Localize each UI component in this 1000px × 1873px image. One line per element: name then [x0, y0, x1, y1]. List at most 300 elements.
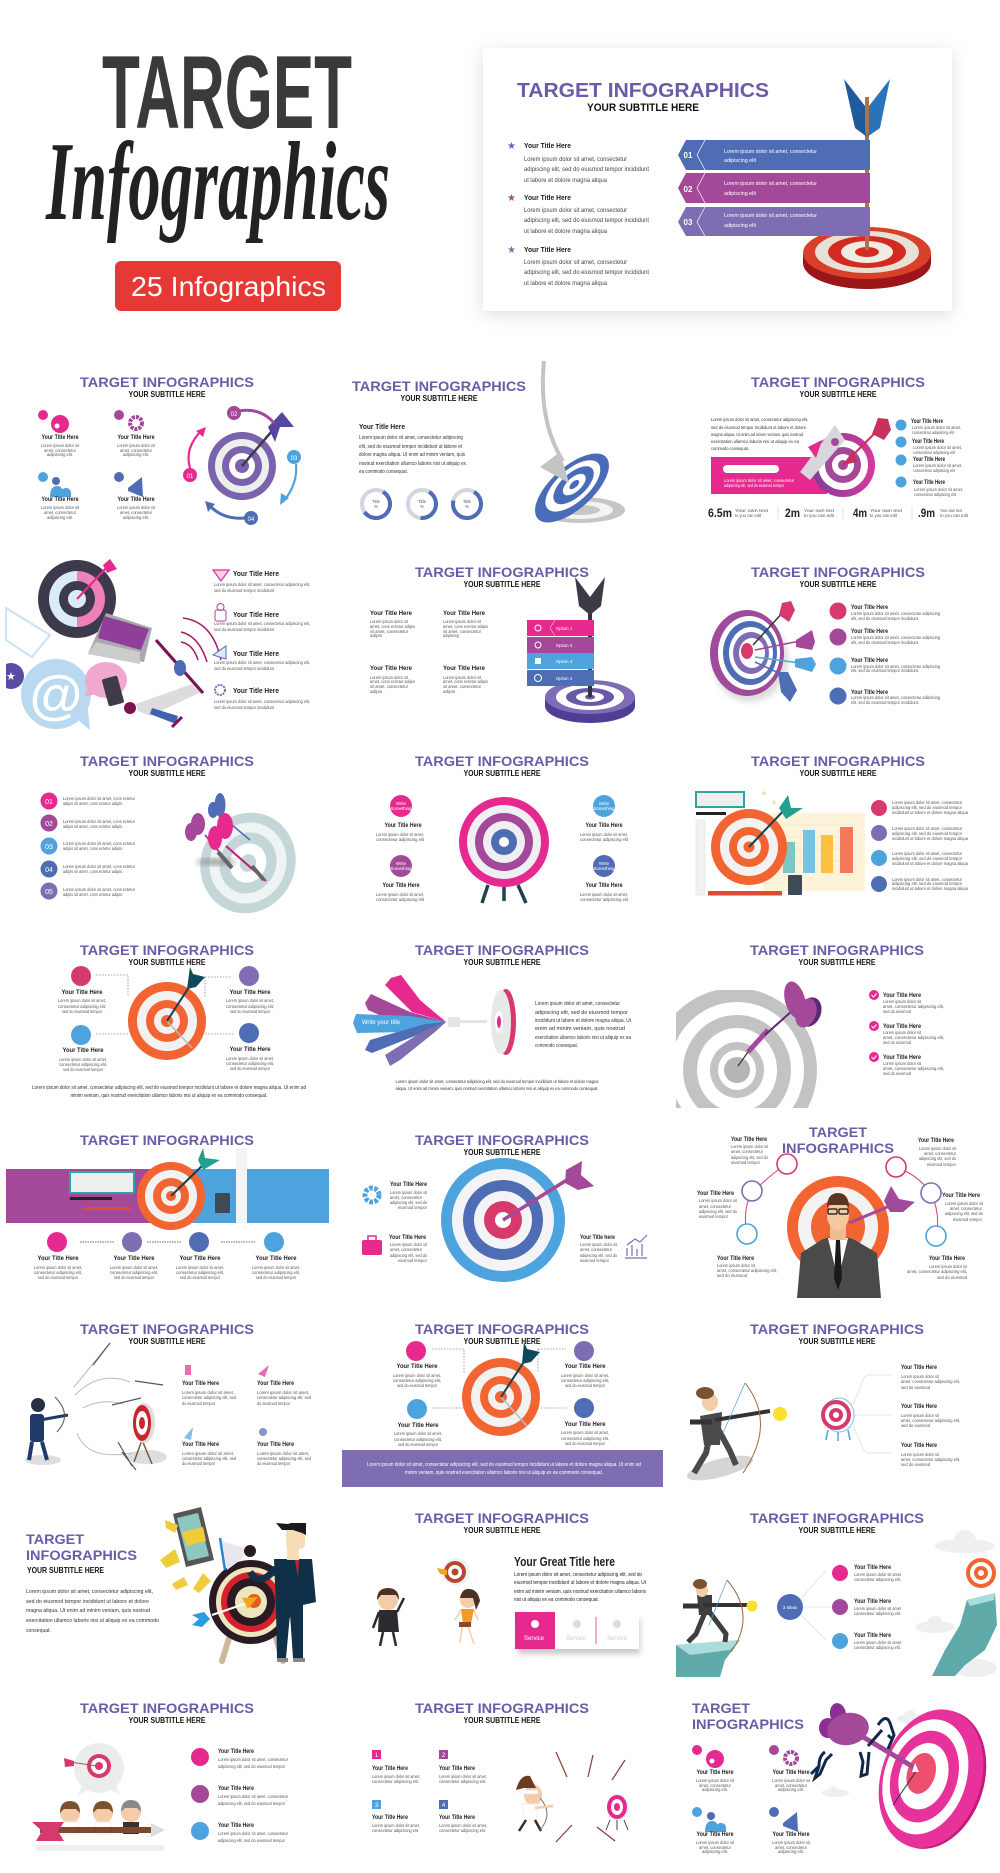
- target: purple with cycle arrows: 02: [231, 412, 238, 418]
- text blocks: sed do eiusmod: [901, 1462, 931, 1467]
- text block: [359, 424, 466, 475]
- text blocks: eiusmod tempor: [953, 1217, 982, 1222]
- numbered list: Lorem ipsum dolor sit amet, cons ectetur: [63, 864, 135, 869]
- stats row: 2m: [785, 506, 800, 520]
- text: four items: adipiscing elit.: [47, 515, 73, 520]
- target: purple with cycle arrows: [183, 406, 301, 525]
- text: four items: Lorem ipsum dolor sit: [696, 1778, 735, 1783]
- text block: consequat.: [26, 1628, 51, 1634]
- heading and text: Your Great Title here: [514, 1554, 615, 1569]
- panel: featured slide card: [483, 48, 952, 315]
- process steps: consectetur adipiscing elit,: [110, 1270, 158, 1275]
- text blocks: Lorem ipsum dolor sit: [901, 1413, 940, 1418]
- wordmark: Infographics script: Infographics: [45, 120, 390, 244]
- target with four darts: [710, 601, 816, 702]
- four callouts: consectetur adipiscing elit,: [58, 1004, 106, 1009]
- numbered items: Lorem ipsum dolor sit amet,: [439, 1823, 487, 1828]
- stats row: Your own text: [804, 508, 835, 513]
- text columns: adipiscing: [443, 633, 459, 638]
- text blocks: sed do eiusmod: [717, 1273, 748, 1278]
- text: four items: [41, 435, 156, 520]
- list: four items: Lorem ipsum dolor sit amet,: [914, 487, 963, 492]
- list: three items: [191, 1748, 288, 1843]
- text: four items: Lorem ipsum dolor sit: [41, 443, 80, 448]
- checklist: sed do eiusmod: [883, 1040, 912, 1045]
- list: four items: [871, 800, 969, 892]
- panel: slide row 5 col 3: INFOGRAPHICS: [782, 1140, 894, 1156]
- list: four items: adipiscing elit, sed do eiusmod tempor: [892, 856, 962, 861]
- list: four items: consectetur adipiscing elit: [913, 468, 956, 473]
- panel: slide row 7 col 1: TARGET: [26, 1531, 84, 1547]
- list: four items: Your Title Here: [233, 686, 279, 695]
- text: four items: adipiscing elit.: [702, 1787, 728, 1792]
- text block: enim ad minim veniam, quis nostrud: [535, 1026, 625, 1032]
- process steps: Your Title Here: [38, 1256, 79, 1262]
- text: four items: adipiscing elit.: [702, 1849, 728, 1854]
- items: Lorem ipsum dolor sit amet,: [182, 1451, 234, 1456]
- businessman: [250, 1523, 316, 1662]
- numbered list: adipis sit amet, cons ectetur adipis.: [63, 869, 123, 874]
- text blocks: amet, consectetur adipiscing elit,: [901, 1457, 960, 1462]
- stats row: Your own text: [870, 508, 903, 513]
- left and right items: Lorem ipsum dolor sit: [580, 1242, 618, 1247]
- list: four items: Lorem ipsum dolor sit amet, consectetur adipiscing elit,: [214, 582, 310, 587]
- list: four items: incididunt ut labore et dolore magna aliqua: [892, 861, 969, 866]
- text blocks: eiusmod tempor: [927, 1162, 956, 1167]
- dart shaft and fletching: [575, 577, 605, 697]
- panel: slide row 4 col 2: [353, 942, 632, 1091]
- list: three items: adipiscing elit, sed do eiusmod tempor: [218, 1764, 285, 1769]
- text blocks: adipiscing elit, sed do: [945, 1211, 984, 1216]
- process steps: Lorem ipsum dolor sit amet,: [34, 1265, 82, 1270]
- four callouts: Lorem ipsum dolor sit amet,: [394, 1431, 442, 1436]
- icons: four items: [38, 410, 143, 497]
- process steps: Your Title Here: [256, 1256, 297, 1262]
- numbered items: 2: [442, 1753, 446, 1759]
- target with darts: [184, 793, 312, 929]
- four callouts: Lorem ipsum dolor sit amet,: [59, 1057, 107, 1062]
- checklist: Lorem ipsum dolor sit: [883, 1030, 922, 1035]
- panel: slide row 8 col 3: INFOGRAPHICS: [692, 1716, 804, 1732]
- target: red 3D: [803, 227, 931, 289]
- donut charts: %: [420, 504, 424, 509]
- stats row: 6.5m: [708, 506, 732, 520]
- stats row: 4m: [853, 506, 867, 520]
- text columns: sit amet, consectetur: [370, 629, 408, 634]
- list: three items: adipiscing elit, sed do eiusmod tempor: [218, 1801, 285, 1806]
- text blocks: Lorem ipsum dolor sit: [945, 1201, 984, 1206]
- purple footer banner: [342, 1450, 663, 1487]
- panel: slide row 8 col 2: YOUR SUBTITLE HERE: [464, 1716, 541, 1725]
- list: four items: elit, sed do eiusmod tempor incididunt.: [851, 616, 919, 621]
- text blocks: Your Title Here: [901, 1365, 938, 1371]
- text list: Your Title Here: [524, 245, 571, 254]
- cartoon people with target: [373, 1558, 480, 1646]
- list: four items: Your Title Here: [851, 629, 889, 635]
- four callouts: consectetur adipiscing elit: [376, 837, 425, 842]
- text columns: Your Title Here: [370, 666, 413, 672]
- at-sign bubble: @: [30, 665, 82, 725]
- list: four items: sed do eiusmod tempor incididunt: [214, 588, 275, 593]
- team on arrow: [32, 1800, 165, 1851]
- numbered items: Lorem ipsum dolor sit amet,: [439, 1774, 487, 1779]
- donut charts: Title: [463, 499, 472, 504]
- text block: sed do eiusmod tempor incididunt ut labore et dolore: [26, 1599, 149, 1605]
- panel: slide row 3 col 2: [376, 753, 629, 903]
- four callouts: Write: [396, 861, 407, 866]
- numbered items: Your Title Here: [439, 1815, 476, 1821]
- list: four items: Lorem ipsum dolor sit amet, consectetur adipiscing: [851, 664, 940, 669]
- four callouts: consectetur adipiscing elit: [580, 897, 629, 902]
- items: consectetur adipiscing elit, sed: [257, 1395, 312, 1400]
- dotted connectors: [432, 1349, 568, 1408]
- text columns: adipis: [370, 633, 383, 638]
- target: black red cream: [192, 1560, 293, 1661]
- panel: slide row 4 col 2: TARGET INFOGRAPHICS: [415, 942, 589, 958]
- checklist: [869, 990, 944, 1076]
- target: dark with pink half: [38, 559, 117, 638]
- numbered items: consectetur adipiscing elit.: [372, 1779, 419, 1784]
- ribbons: three options: adipiscing elit: [724, 223, 756, 229]
- text blocks: amet, consectetur adipiscing elit,: [907, 1269, 967, 1274]
- target and businessman: [787, 1176, 915, 1298]
- left and right items: adipiscing elit, sed do: [580, 1253, 617, 1258]
- four callouts: Lorem ipsum dolor sit amet,: [561, 1373, 609, 1378]
- star badge: [6, 663, 24, 689]
- list: four items: sed do eiusmod tempor incididunt: [214, 627, 275, 632]
- list: four items: elit, sed do eiusmod tempor incididunt.: [851, 640, 919, 645]
- items: Your Title Here: [182, 1381, 220, 1387]
- process steps: Your Title Here: [180, 1256, 221, 1262]
- text block: nostrud exercitation ullamco laboris nisi ut aliquip ex: [359, 461, 466, 467]
- text: four items: Your Title Here: [772, 1770, 810, 1776]
- target: blue with purple arrow: [441, 1158, 594, 1282]
- text columns: Your Title Here: [443, 666, 486, 672]
- left and right items: eiusmod tempor: [398, 1205, 427, 1210]
- four callouts: [376, 795, 629, 902]
- donut charts: %: [374, 504, 378, 509]
- text: four items: Your Title Here: [42, 497, 79, 503]
- text columns: Lorem ipsum dolor sit: [370, 675, 409, 680]
- list: four items: Your Title Here: [911, 419, 944, 425]
- numbered items: Your Title Here: [372, 1766, 409, 1772]
- idea tree: Lorem ipsum dolor sit amet: [854, 1640, 902, 1645]
- panel: slide row 4 col 3: [676, 946, 944, 1108]
- text list: Your Title Here: [524, 193, 571, 202]
- four callouts: consectetur adipiscing elit,: [59, 1062, 107, 1067]
- text columns: sit amet, consectetur: [370, 684, 408, 689]
- text columns: Your Title Here: [370, 611, 413, 617]
- left and right items: Your Title Here: [390, 1182, 428, 1188]
- panel: slide row 2 col 2: TARGET INFOGRAPHICS: [415, 564, 589, 580]
- panel: slide row 4 col 1: YOUR SUBTITLE HERE: [128, 958, 206, 967]
- panel: featured slide card: TARGET INFOGRAPHICS: [517, 80, 769, 102]
- footer text: [396, 1079, 599, 1091]
- items: Your Title Here: [182, 1442, 220, 1448]
- text block: Lorem ipsum dolor sit amet, consectetur adipiscing elit,: [711, 417, 808, 422]
- numbered items: [372, 1750, 487, 1833]
- text blocks: Lorem ipsum dolor sit: [901, 1374, 940, 1379]
- flag: [220, 1538, 256, 1570]
- text: four items: Your Title Here: [118, 435, 155, 441]
- target: purple with cycle arrows: 01: [187, 474, 194, 480]
- text blocks: Lorem ipsum dolor sit: [717, 1263, 756, 1268]
- text blocks: amet, consectetur: [731, 1149, 763, 1154]
- text list: adipiscing elit, sed do eiusmod tempor incididunt: [524, 218, 649, 224]
- panel: slide row 6 col 2: YOUR SUBTITLE HERE: [464, 1337, 541, 1346]
- checklist: amet, consectetur adipiscing elit,: [883, 1004, 944, 1009]
- list: four items: Your Title Here: [233, 649, 279, 658]
- text block: [26, 1589, 159, 1634]
- left and right items: adipiscing elit, sed do: [390, 1253, 427, 1258]
- panel: slide row 7 col 3: [676, 1510, 997, 1677]
- panel: slide row 3 col 3: TARGET INFOGRAPHICS: [751, 753, 925, 769]
- archer and target: [25, 1343, 167, 1470]
- list: four items: [830, 602, 940, 705]
- idea tree: Your Title Here: [854, 1633, 892, 1639]
- numbered list: [40, 792, 135, 900]
- list: four items: Lorem ipsum dolor sit amet, consectetur: [892, 800, 962, 805]
- panel: slide row 5 col 1: TARGET INFOGRAPHICS: [80, 1132, 254, 1148]
- option bars: Option 3: [556, 659, 573, 664]
- list: three items: Lorem ipsum dolor sit amet, consectetur: [218, 1794, 288, 1799]
- four callouts: consectetur adipiscing elit,: [561, 1436, 609, 1441]
- list: four items: Lorem ipsum dolor sit amet, consectetur adipiscing elit,: [214, 621, 310, 626]
- stats row: to you can edit: [870, 513, 898, 518]
- idea tree: [777, 1565, 902, 1650]
- four callouts: consectetur adipiscing elit,: [226, 1004, 274, 1009]
- process steps: sed do eiusmod tempor: [38, 1275, 78, 1280]
- panel: slide row 7 col 3: TARGET INFOGRAPHICS: [750, 1510, 924, 1526]
- text: four items: Your Title Here: [696, 1770, 734, 1776]
- idea tree: Your Title Here: [854, 1599, 892, 1605]
- panel: slide row 6 col 3: [685, 1321, 960, 1485]
- items: Lorem ipsum dolor sit amet,: [257, 1390, 309, 1395]
- ribbons: three options: 01: [684, 151, 693, 160]
- panel: slide row 3 col 3: [696, 753, 969, 896]
- list: four items: Your Title Here: [912, 439, 945, 445]
- target: tilted blue with grey arrow: [524, 361, 625, 534]
- list: four items: sed do eiusmod tempor incididunt: [214, 666, 275, 671]
- text: four items: amet, consectetur: [775, 1845, 807, 1850]
- panel: slide row 3 col 3: YOUR SUBTITLE HERE: [800, 769, 877, 778]
- text columns: amet, cons ectetur adipis: [370, 679, 416, 684]
- option bars: Option 4: [556, 676, 573, 681]
- items: do eiusmod tempor: [182, 1461, 215, 1466]
- numbered list: 03: [45, 844, 53, 851]
- text blocks: amet, consectetur: [950, 1206, 982, 1211]
- numbered list: 05: [45, 889, 53, 896]
- pink panel: adipiscing elit, sed do eiusmod tempor: [724, 483, 784, 488]
- text block: Lorem ipsum dolor sit amet, consectetur adipiscing: [359, 435, 463, 441]
- text: four items: amet, consectetur: [44, 510, 76, 515]
- text list: ut labore et dolore magna aliqua: [524, 281, 608, 287]
- heading and text: [514, 1554, 646, 1603]
- idea tree: consectetur adipiscing elit.: [854, 1645, 901, 1650]
- four callouts: Your Title Here: [586, 823, 623, 829]
- four callouts: Lorem ipsum dolor sit amet,: [58, 998, 106, 1003]
- four callouts: sed do eiusmod tempor: [230, 1009, 270, 1014]
- list: four items: elit, sed do eiusmod tempor incididunt.: [851, 668, 919, 673]
- list: four items: Your Title Here: [233, 569, 279, 578]
- text block: [711, 417, 808, 451]
- heading and text: eiusmod tempor incididunt ut labore et dolore magna aliqua. Ut: [514, 1580, 646, 1586]
- text blocks: adipiscing elit, sed do: [919, 1156, 956, 1161]
- text: four items: Lorem ipsum dolor sit: [772, 1840, 811, 1845]
- ribbons: three options: Lorem ipsum dolor sit amet, consectetur: [724, 213, 817, 219]
- four callouts: Your Title Here: [384, 823, 422, 829]
- stats row: [708, 506, 969, 520]
- four callouts: Your Title Here: [564, 1422, 606, 1428]
- four callouts: Lorem ipsum dolor sit amet,: [226, 998, 274, 1003]
- panel: slide row 1 col 3: TARGET INFOGRAPHICS: [751, 374, 925, 390]
- panel: slide row 1 col 1: YOUR SUBTITLE HERE: [128, 390, 206, 399]
- text blocks: eiusmod tempor: [731, 1160, 760, 1165]
- panel: slide row 4 col 3: YOUR SUBTITLE HERE: [798, 958, 876, 967]
- numbered list: adipis sit amet, cons ectetur adipis.: [63, 801, 123, 806]
- footer text: Lorem ipsum dolor sit amet, consectetur adipiscing elit, sed do eiusmod tempor incididunt ut labore et dolore magna aliqua. Ut enim ad: [32, 1085, 306, 1091]
- numbered items: consectetur adipiscing elit.: [372, 1828, 419, 1833]
- text block: Lorem ipsum dolor sit amet, consectetur: [535, 1001, 620, 1007]
- target: purple with cycle arrows: 03: [291, 456, 298, 462]
- text: four items: Lorem ipsum dolor sit: [117, 505, 156, 510]
- items: consectetur adipiscing elit, sed: [257, 1456, 312, 1461]
- left and right items: amet, consectetur: [390, 1247, 422, 1252]
- panel: slide row 8 col 1: YOUR SUBTITLE HERE: [128, 1716, 206, 1725]
- blindfolded archer, target, arrows: [516, 1752, 629, 1842]
- list: three items: Lorem ipsum dolor sit amet, consectetur: [218, 1757, 288, 1762]
- list: four items: Your Title Here: [233, 610, 279, 619]
- phone and envelopes: [160, 1507, 214, 1593]
- ribbons fan: [353, 975, 487, 1066]
- ribbons: three options: 03: [684, 218, 693, 227]
- text list: Lorem ipsum dolor sit amet, consectetur: [524, 260, 627, 266]
- text list: Your Title Here: [524, 141, 571, 150]
- list: four items: consectetur adipiscing elit: [912, 430, 955, 435]
- panel: slide row 8 col 2: TARGET INFOGRAPHICS: [415, 1700, 589, 1716]
- panel: slide row 6 col 3: TARGET INFOGRAPHICS: [750, 1321, 924, 1337]
- four callouts: Something: [390, 806, 412, 811]
- text blocks: amet, consectetur adipiscing elit,: [901, 1379, 960, 1384]
- text columns: amet, cons ectetur adipis: [443, 679, 489, 684]
- dart and figures: [811, 1702, 919, 1805]
- numbered list: Lorem ipsum dolor sit amet, cons ectetur: [63, 819, 135, 824]
- panel: slide row 6 col 1: [25, 1321, 312, 1470]
- list: four items: Lorem ipsum dolor sit amet, consectetur adipiscing: [851, 695, 940, 700]
- text block: ea commodo consequat.: [359, 469, 408, 475]
- option bars: Option 1: [556, 626, 573, 631]
- checklist: Lorem ipsum dolor sit: [883, 1061, 922, 1066]
- four callouts: Your Title Here: [396, 1364, 438, 1370]
- panel: slide row 2 col 3: [710, 564, 940, 705]
- text: four items: Your Title Here: [118, 497, 155, 503]
- text: four items: adipiscing elit.: [47, 452, 73, 457]
- stats row: to you can edit: [735, 513, 762, 518]
- process steps: sed do eiusmod tempor: [114, 1275, 154, 1280]
- idea tree: 3 Ideas: [783, 1605, 798, 1610]
- text: four items: Lorem ipsum dolor sit: [696, 1840, 735, 1845]
- badge: 25 Infographics: [115, 261, 341, 311]
- numbered items: consectetur adipiscing elit.: [439, 1779, 486, 1784]
- clouds: [821, 1710, 927, 1797]
- text blocks: sed do eiusmod: [937, 1275, 968, 1280]
- process steps: Your Title Here: [114, 1256, 155, 1262]
- panel: slide row 8 col 2: [372, 1700, 629, 1842]
- panel: slide row 4 col 1: [32, 942, 306, 1099]
- option bars: [527, 620, 594, 686]
- numbered items: Your Title Here: [372, 1815, 409, 1821]
- four callouts: Lorem ipsum dolor sit amet,: [580, 892, 628, 897]
- panel: slide row 8 col 3: TARGET: [692, 1700, 750, 1716]
- panel: slide row 3 col 1: YOUR SUBTITLE HERE: [128, 769, 206, 778]
- text block: sed do eiusmod tempor incididunt ut labore et dolore: [711, 425, 807, 430]
- pink panel: Lorem ipsum dolor sit amet, consectetur: [724, 478, 794, 483]
- panel: slide row 4 col 3: TARGET INFOGRAPHICS: [750, 942, 924, 958]
- items: Lorem ipsum dolor sit amet,: [257, 1451, 309, 1456]
- ribbons: three options: [678, 140, 870, 236]
- text: four items: amet, consectetur: [120, 448, 152, 453]
- text blocks: Lorem ipsum dolor sit: [919, 1146, 957, 1151]
- panel: slide row 5 col 2: YOUR SUBTITLE HERE: [464, 1148, 541, 1157]
- heading and text: enim ad minim veniam, quis nostrud exercitation ullamco laboris: [514, 1589, 646, 1595]
- list: four items: Lorem ipsum dolor sit amet, consectetur: [892, 851, 962, 856]
- list: three items: Your Title Here: [218, 1749, 255, 1755]
- wordmark: TARGET: TARGET: [102, 35, 352, 151]
- text block: exercitation ullamco laboris nisi ut aliquip ex ea: [711, 439, 800, 444]
- text blocks: Your Title Here: [731, 1137, 768, 1143]
- four callouts: sed do eiusmod tempor: [565, 1441, 605, 1446]
- items: do eiusmod tempor: [257, 1401, 290, 1406]
- text columns: Lorem ipsum dolor sit: [443, 675, 482, 680]
- list: four items: incididunt ut labore et dolore magna aliqua: [892, 886, 969, 891]
- text: four items: Your Title Here: [772, 1832, 810, 1838]
- stats row: Your own text: [735, 508, 769, 513]
- text blocks: Your Title Here: [901, 1443, 938, 1449]
- text list: Lorem ipsum dolor sit amet, consectetur: [524, 157, 627, 163]
- numbered list: adipis sit amet, cons ectetur adipis.: [63, 824, 123, 829]
- panel: slide row 4 col 1: TARGET INFOGRAPHICS: [80, 942, 254, 958]
- items: do eiusmod tempor: [182, 1401, 215, 1406]
- panel: slide row 5 col 2: [362, 1132, 647, 1282]
- chat bubble with phone: [84, 662, 127, 707]
- footer text: aliqua. Ut enim ad minim veniam, quis nostrud exercitation ullamco laboris nisi ut aliquip ex ea commodo consequat.: [396, 1086, 598, 1091]
- panel: slide row 3 col 1: [40, 753, 312, 929]
- stats row: to you can edit: [804, 513, 835, 518]
- items: consectetur adipiscing elit, sed: [182, 1456, 237, 1461]
- text blocks: Your Title Here: [717, 1256, 755, 1262]
- text columns: adipis: [443, 689, 456, 694]
- text: four items: amet, consectetur: [699, 1783, 731, 1788]
- footer text: minim veniam, quis nostrud exercitation ullamco laboris nisi ut aliquip ex ea commodo consequat.: [70, 1093, 268, 1099]
- target: side view: [491, 989, 516, 1055]
- text block: commodo consequat.: [711, 446, 749, 451]
- panel: featured slide card: YOUR SUBTITLE HERE: [587, 102, 699, 114]
- peak and target: [932, 1558, 997, 1676]
- target: grey cropped: [676, 990, 817, 1108]
- items: Your Title Here: [257, 1442, 295, 1448]
- text blocks: Your Title Here: [918, 1138, 955, 1144]
- text blocks: Your Title Here: [901, 1404, 938, 1410]
- text blocks: amet, consectetur adipiscing elit,: [901, 1418, 960, 1423]
- panel: slide row 1 col 2: YOUR SUBTITLE HERE: [400, 394, 478, 403]
- panel: slide row 2 col 3: TARGET INFOGRAPHICS: [751, 564, 925, 580]
- list: four items: Your Title Here: [851, 690, 889, 696]
- text blocks: adipiscing elit, sed do: [699, 1209, 738, 1214]
- four callouts: sed do eiusmod tempor: [397, 1383, 437, 1388]
- panel: slide row 2 col 2: YOUR SUBTITLE HERE: [464, 580, 541, 589]
- items: Your Title Here: [257, 1381, 295, 1387]
- at-sign bubble: [21, 659, 91, 730]
